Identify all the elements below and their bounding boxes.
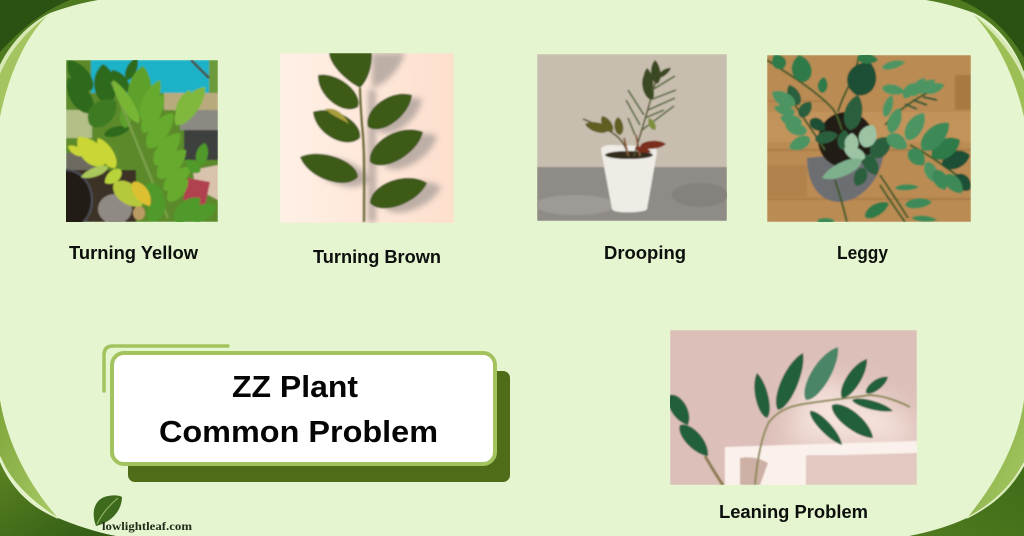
photo: turning brown <box>280 53 454 223</box>
label: turning brown: Turning Brown <box>313 247 441 267</box>
logo: lowlightleaf.com <box>94 495 192 533</box>
label: leggy: Leggy <box>837 243 888 263</box>
label: drooping: Drooping <box>604 243 686 263</box>
card accent bracket <box>104 346 228 391</box>
label: leaning problem: Leaning Problem <box>719 502 868 522</box>
label: turning yellow: Turning Yellow <box>69 243 199 263</box>
photo: leggy <box>767 51 975 224</box>
logo: lowlightleaf.com: lowlightleaf.com <box>102 521 192 533</box>
card shadow <box>128 371 510 482</box>
corner leaf: bottom right <box>909 400 1024 536</box>
title card <box>104 346 510 482</box>
corner leaf: top right <box>926 0 1024 117</box>
photo: leaning problem <box>664 330 917 485</box>
photo: drooping <box>535 54 728 221</box>
title text <box>159 369 438 449</box>
title text: ZZ Plant <box>232 369 358 404</box>
icon: leaf <box>94 495 122 526</box>
card body <box>112 353 495 464</box>
title text: Common Problem <box>159 414 438 449</box>
corner leaf: top left <box>0 0 98 117</box>
corner leaf: bottom left <box>0 400 116 536</box>
photo: turning yellow <box>40 55 219 230</box>
